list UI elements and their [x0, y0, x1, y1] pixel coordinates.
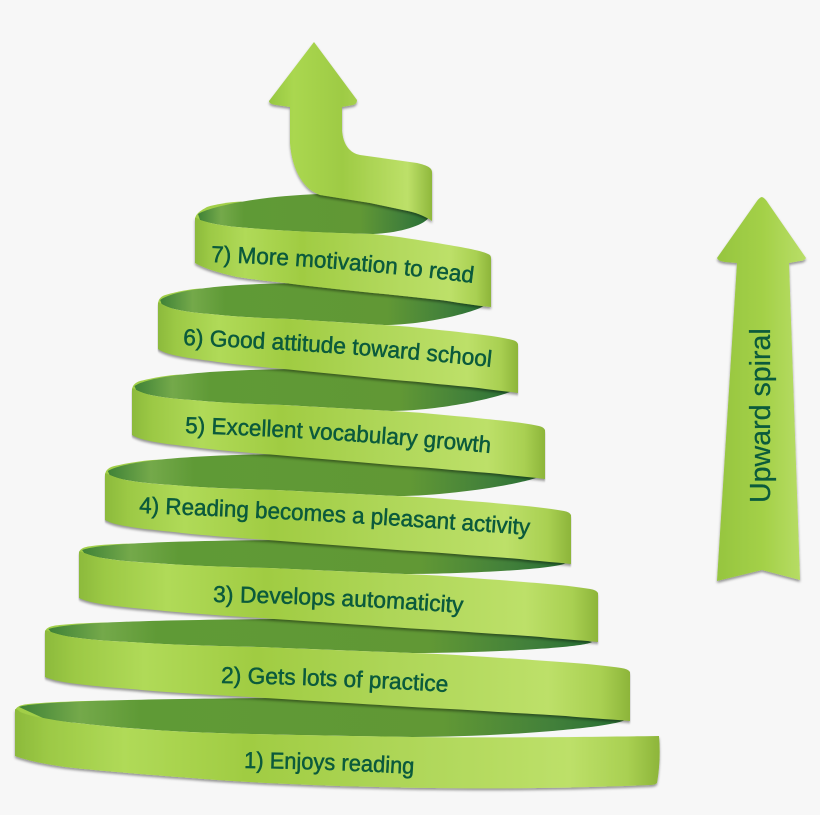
spiral level 6: [158, 273, 518, 393]
spiral level 1: [15, 685, 660, 788]
label 7: 7) More motivation to read: [212, 246, 474, 283]
label 4: 4) Reading becomes a pleasant activity: [139, 496, 531, 540]
label 1: 1) Enjoys reading: [245, 751, 414, 779]
upward arrow: [717, 197, 806, 581]
arrow label: Upward spiral: [745, 328, 777, 503]
spiral labels: [139, 246, 531, 779]
arrow shape: [717, 197, 806, 581]
label 6: 6) Good attitude toward school: [184, 328, 492, 367]
label 2: 2) Gets lots of practice: [222, 666, 448, 693]
spiral level 5: [132, 359, 545, 479]
label 3: 3) Develops automaticity: [214, 585, 464, 618]
spiral level 2: [45, 609, 630, 721]
spiral top arrow: [269, 42, 432, 221]
spiral level 3: [79, 530, 598, 642]
spiral level 4: [105, 444, 571, 564]
spiral level 7: [195, 190, 491, 307]
label 5: 5) Excellent vocabulary growth: [186, 416, 490, 454]
